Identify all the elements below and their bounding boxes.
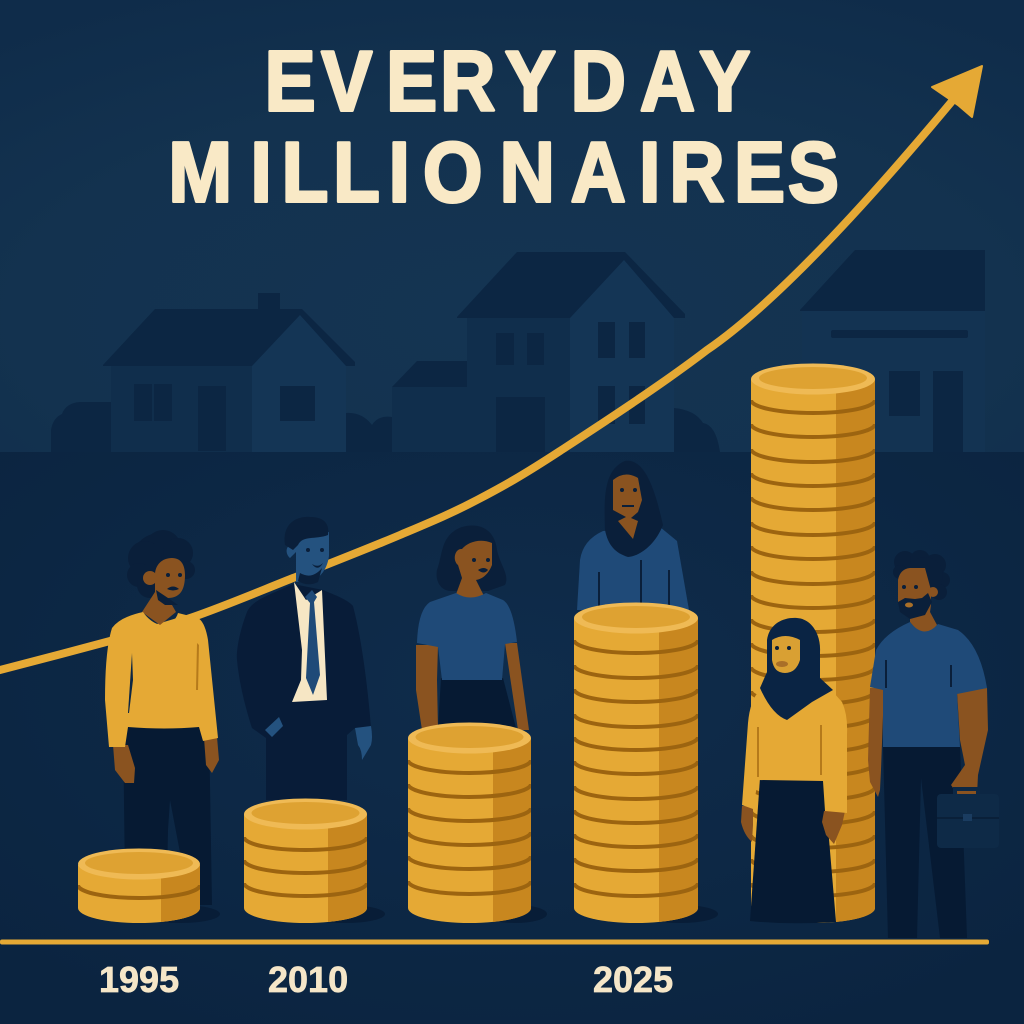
coin stack: middle — [408, 722, 547, 923]
house 2 — [457, 252, 685, 452]
coin stack: 2025 — [574, 602, 718, 923]
timeline axis — [0, 940, 989, 944]
year labels: 1995 — [99, 959, 179, 1000]
panel: house silhouettes — [51, 250, 985, 452]
person: man in dark suit — [237, 517, 372, 800]
coin stack: 1995 — [78, 848, 220, 923]
side building — [392, 361, 468, 452]
coin stack: 2010 — [244, 798, 385, 923]
person: woman in blue top — [416, 526, 529, 730]
coin stack: tallest — [751, 364, 875, 923]
person: woman in hijab — [741, 618, 847, 923]
year labels: 2025 — [593, 959, 673, 1000]
person: man in blue t-shirt with briefcase — [868, 550, 999, 938]
ground — [0, 452, 1024, 1024]
year labels — [99, 959, 673, 1000]
briefcase — [937, 789, 999, 848]
background sky — [0, 0, 1024, 452]
hair — [893, 550, 950, 600]
year labels: 2010 — [268, 959, 348, 1000]
title: EVERYDAY — [265, 35, 750, 129]
bushes — [51, 402, 720, 452]
title: MILLIONAIRES — [168, 126, 839, 220]
title — [168, 35, 839, 220]
rising trend arrow — [0, 66, 982, 671]
person: man in yellow sweater — [105, 530, 219, 905]
hair — [127, 530, 195, 598]
person: woman in blue jacket with long hair — [577, 461, 689, 610]
house 1 — [103, 293, 355, 452]
house 3 — [800, 250, 985, 452]
